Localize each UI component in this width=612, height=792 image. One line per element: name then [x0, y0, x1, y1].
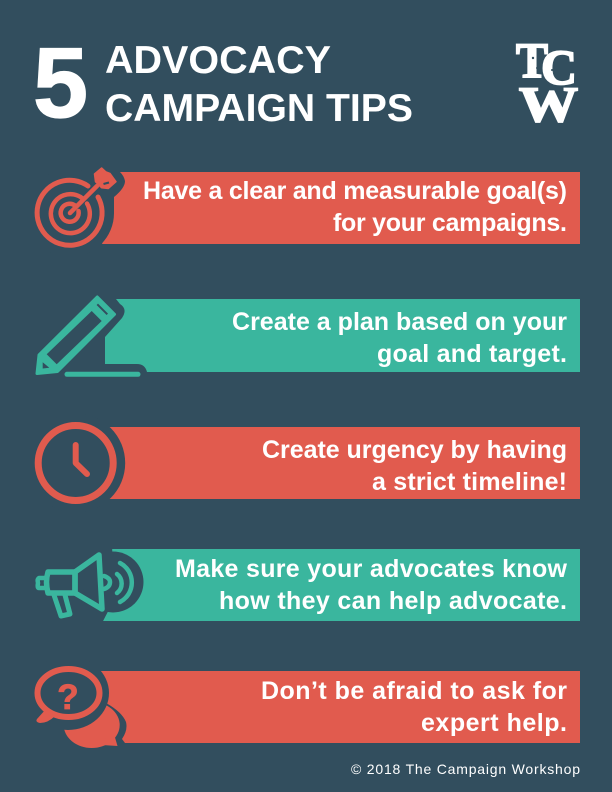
- red banner 5: [99, 671, 580, 743]
- tip 1 text: Have a clear and measurable goal(s): [143, 177, 567, 205]
- green banner 4: [103, 549, 580, 621]
- tip 1 text: [143, 177, 567, 237]
- title: [33, 27, 413, 138]
- icon: clock: [38, 426, 113, 500]
- red banner 3: [105, 427, 580, 499]
- icon: speech bubbles: [27, 656, 120, 748]
- panel: tip 3: [26, 414, 580, 512]
- tip 4 text: how they can help advocate.: [219, 587, 567, 615]
- tip 3 text: [262, 436, 567, 496]
- tip 3 text: Create urgency by having: [262, 436, 567, 464]
- tip 4 text: [175, 555, 568, 615]
- banner cut-out around megaphone: [82, 545, 144, 621]
- logo: TCW: C: [541, 39, 577, 95]
- logo: TCW: T: [516, 32, 548, 88]
- panel: tip 4: [38, 545, 580, 621]
- logo: TCW: [516, 32, 578, 132]
- tip 5 text: expert help.: [421, 709, 567, 737]
- panel: tip 2: [37, 297, 580, 374]
- banner cut-out around clock: [26, 414, 125, 512]
- title line 2: CAMPAIGN TIPS: [105, 87, 413, 130]
- icon: speech bubbles: ?: [57, 678, 79, 717]
- green banner 2: [105, 299, 580, 372]
- icon: megaphone: [38, 555, 132, 616]
- icon: target with arrow: [37, 168, 116, 245]
- tip 3 text: a strict timeline!: [372, 468, 567, 496]
- tip 2 text: [232, 308, 567, 368]
- red banner 1: [102, 172, 580, 244]
- panel: tip 1: [26, 168, 580, 257]
- tip 5 text: Don’t be afraid to ask for: [261, 677, 567, 705]
- tip 4 text: Make sure your advocates know: [175, 555, 568, 583]
- banner cut-out around target: [26, 169, 114, 257]
- title line 1: ADVOCACY: [105, 39, 331, 82]
- footer copyright: © 2018 The Campaign Workshop: [351, 761, 580, 777]
- panel: tip 5: [27, 656, 580, 748]
- tip 2 text: goal and target.: [377, 340, 567, 368]
- big number 5: 5: [33, 27, 88, 138]
- logo: TCW: W: [519, 76, 578, 132]
- tip 1 text: for your campaigns.: [333, 209, 567, 237]
- tip 2 text: Create a plan based on your: [232, 308, 567, 336]
- tip 5 text: [261, 677, 567, 737]
- icon: pencil: [37, 297, 138, 374]
